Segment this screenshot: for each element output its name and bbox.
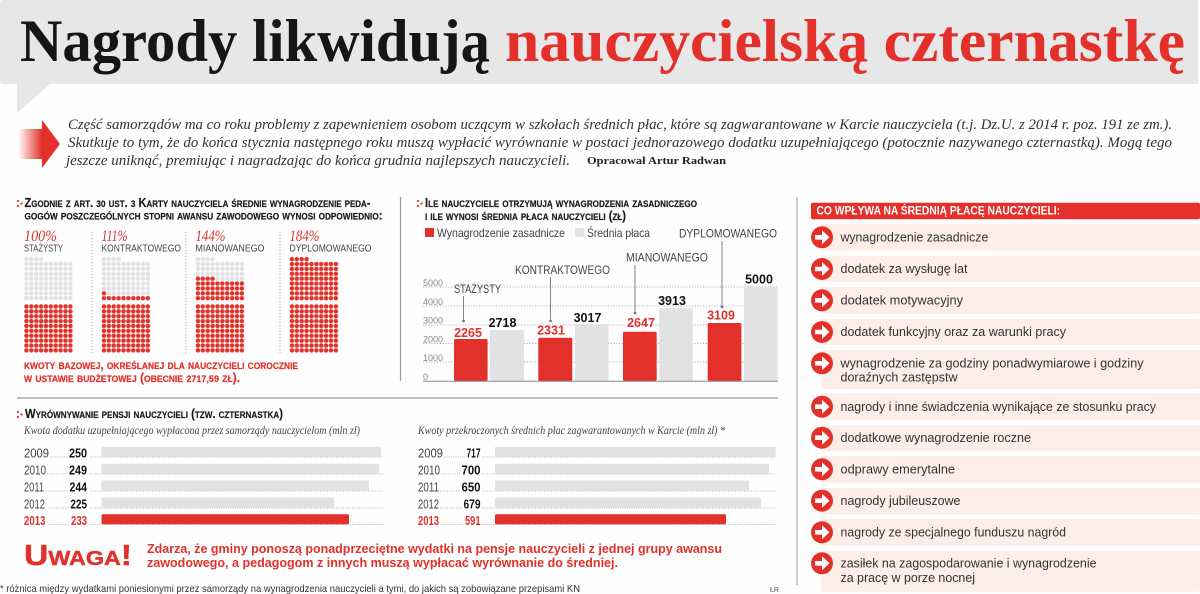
callout: Uwaga	[24, 540, 722, 572]
intro text: Opracował Artur Radwan	[587, 155, 726, 167]
bar values: 2331	[537, 324, 565, 338]
left bar table: 2009	[24, 446, 49, 460]
left bar table: 2013	[24, 514, 46, 528]
axis labels	[423, 278, 443, 382]
item: dodatek za wysługę lat	[811, 256, 1200, 282]
note: base amount: w ustawie budżetowej (obecnie 2717,59 zł).	[24, 371, 240, 385]
item: nagrody i inne świadczenia	[811, 393, 1200, 420]
bars	[454, 287, 778, 381]
callout: Uwaga: Zdarza, że gminy ponoszą ponadprzeciętne wydatki na pensje nauczycieli z jednej grupy awansu	[147, 541, 722, 556]
left bar table	[23, 423, 383, 528]
grade labels with leaders: MIANOWANEGO	[626, 250, 708, 264]
bar values: 3017	[574, 311, 601, 325]
axis labels: 4000	[423, 297, 443, 307]
item: zasiłek na zagospodarowanie	[811, 551, 1200, 592]
item: nagrody jubileuszowe	[811, 488, 1200, 515]
panel: base pay vs average pay chart	[417, 196, 778, 382]
item: dodatek motywacyjny: dodatek motywacyjny	[840, 292, 963, 308]
heading: chart: Ile nauczyciele otrzymują wynagrodzenia zasadniczego	[425, 196, 697, 210]
column: kontraktowego 111%	[102, 228, 181, 353]
column: stażyści 100%: 100%	[24, 228, 57, 245]
left bar table: Kwota dodatku uzupełniającego wypłacona przez samorządy nauczycielom (mln zł)	[23, 423, 360, 437]
column: stażyści 100%	[24, 228, 73, 353]
right bar table: 700	[462, 464, 481, 478]
column: kontraktowego 111%: 111%	[102, 228, 128, 245]
axis labels: 1000	[423, 353, 443, 363]
right bar table: 2010	[418, 464, 440, 478]
note: base amount: kwoty bazowej, określanej dla nauczycieli corocznie	[24, 358, 298, 372]
left bar table: 244	[70, 480, 87, 494]
left bar table: 233	[71, 514, 87, 528]
grade labels with leaders: DYPLOMOWANEGO	[679, 226, 777, 240]
column: mianowanego 144%: 144%	[196, 228, 226, 245]
callout: Uwaga: zawodowego, a pedagogom z innych muszą wypłacać wyrównanie do średniej.	[147, 555, 618, 570]
axis labels: 2000	[423, 334, 443, 344]
title banner	[0, 0, 1198, 113]
panel header	[811, 203, 1200, 219]
heading: grades: Zgodnie z art. 30 ust. 3 Karty nauczyciela średnie wynagrodzenie peda-	[24, 196, 370, 210]
legend: Średnia płaca	[587, 226, 650, 240]
left bar table: 2010	[24, 464, 46, 478]
axis labels: 0	[423, 372, 428, 382]
column: stażyści 100%: STAŻYSTY	[24, 242, 63, 254]
left bar table: 225	[70, 498, 87, 512]
intro text: Część samorządów ma co roku problemy z zapewnieniem osobom uczącym w szkołach średnich płac, które są zagwarantowane w Karcie nauczyciela (t.j. Dz.U. z 2014 r. poz. 191 ze zm.).	[68, 117, 1172, 133]
panel header: CO WPŁYWA NA ŚREDNIĄ PŁACĘ NAUCZYCIELI:	[816, 204, 1060, 218]
bar values: 3913	[658, 294, 686, 308]
column: dyplomowanego 184%: DYPLOMOWANEGO	[290, 244, 372, 254]
right bar table: 2013	[418, 514, 439, 528]
item: godziny ponadwymiarowe: doraźnych zastępstw	[840, 370, 958, 384]
bar values: 2718	[489, 316, 516, 330]
note: base amount	[24, 358, 298, 385]
heading: chart	[417, 196, 697, 223]
column: dyplomowanego 184%	[290, 228, 372, 353]
axis labels: 3000	[423, 316, 443, 326]
legend	[425, 226, 650, 240]
item: dodatek funkcyjny: dodatek funkcyjny oraz za warunki pracy	[840, 324, 1066, 339]
legend: Wynagrodzenie zasadnicze	[437, 226, 565, 240]
bar values	[454, 272, 773, 340]
right bar table: 2009	[418, 446, 443, 460]
right bar table: Kwoty przekroczonych średnich płac zagwarantowanych w Karcie (mln zł) *	[417, 423, 725, 437]
bar values: 3109	[707, 308, 735, 322]
item: dodatkowe wynagrodzenie roczne: dodatkowe wynagrodzenie roczne	[840, 430, 1031, 445]
footnote: ŁR	[770, 587, 779, 594]
item: wynagrodzenie zasadnicze: wynagrodzenie zasadnicze	[840, 230, 988, 244]
column: mianowanego 144%	[196, 228, 265, 353]
grade labels with leaders: STAŻYSTY	[454, 282, 501, 296]
right bar table: 591	[465, 514, 481, 528]
item: fundusz nagród: nagrody ze specjalnego funduszu nagród	[840, 524, 1066, 540]
title banner: nauczycielską czternastkę	[505, 8, 1185, 74]
right bar table: 650	[462, 480, 481, 494]
item: dodatek motywacyjny	[811, 287, 1200, 314]
intro text: jeszcze uniknąć, premiując i nagradzając do końca grudnia najlepszych nauczycieli.	[64, 153, 570, 169]
item: wynagrodzenie zasadnicze	[811, 224, 1200, 251]
panel: what affects average pay	[811, 203, 1200, 592]
item: godziny ponadwymiarowe: wynagrodzenie za godziny ponadwymiarowe i godziny	[840, 356, 1144, 370]
item: odprawy emerytalne: odprawy emerytalne	[840, 462, 955, 476]
column: kontraktowego 111%: KONTRAKTOWEGO	[102, 244, 181, 254]
left bar table: 2012	[24, 498, 45, 512]
right bar table: 717	[466, 446, 481, 460]
column: dyplomowanego 184%: 184%	[290, 228, 320, 245]
item: dodatek funkcyjny	[811, 319, 1200, 345]
column: mianowanego 144%: MIANOWANEGO	[196, 244, 265, 254]
item: nagrody i inne świadczenia: nagrody i inne świadczenia wynikające ze stosunku pracy	[840, 399, 1156, 414]
left bar table: 2011	[24, 480, 44, 494]
title banner: Nagrody likwidują	[20, 8, 490, 74]
bar values: 5000	[745, 272, 773, 286]
axis labels: 5000	[423, 278, 443, 288]
left bar table: 250	[69, 446, 87, 460]
right bar table: 2012	[418, 498, 439, 512]
panel: salary by promotion grade	[17, 196, 383, 385]
icon: red intro arrow	[18, 120, 60, 168]
item: godziny ponadwymiarowe	[811, 350, 1200, 389]
right bar table: 679	[464, 498, 481, 512]
callout: Uwaga: Uwaga!	[24, 540, 132, 572]
heading: grades: gogów poszczególnych stopni awansu zawodowego wynosi odpowiednio:	[24, 208, 382, 222]
item: nagrody jubileuszowe: nagrody jubileuszowe	[840, 493, 960, 508]
heading: chart: i ile wynosi średnia płaca nauczycieli (zł)	[425, 209, 626, 223]
left bar table: 249	[69, 464, 87, 478]
intro text: Skutkuje to tym, że do końca stycznia następnego roku muszą wypłacić wyrównanie w postaci jednorazowego dodatku uzupełniającego (potocznie nazywanego czternastką). Mogą tego	[68, 135, 1172, 151]
item: dodatkowe wynagrodzenie roczne	[811, 425, 1200, 451]
heading: grades	[17, 196, 383, 222]
grade labels with leaders	[454, 226, 777, 322]
item: zasiłek na zagospodarowanie: zasiłek na zagospodarowanie i wynagrodzenie	[840, 556, 1096, 570]
panel: equalisation of pensions	[17, 407, 776, 528]
right bar table: 2011	[418, 480, 439, 494]
bar values: 2265	[454, 326, 482, 340]
heading: czternastka: Wyrównywanie pensji nauczycieli (tzw. czternastka)	[25, 407, 283, 421]
item: dodatek za wysługę lat: dodatek za wysługę lat	[840, 261, 968, 276]
item: fundusz nagród	[811, 519, 1200, 546]
intro text	[64, 117, 1172, 169]
grade labels with leaders: KONTRAKTOWEGO	[515, 263, 610, 277]
item: zasiłek na zagospodarowanie: za pracę w porze nocnej	[840, 570, 975, 585]
bar values: 2647	[627, 316, 655, 330]
right bar table	[417, 423, 776, 528]
item: odprawy emerytalne	[811, 456, 1200, 483]
